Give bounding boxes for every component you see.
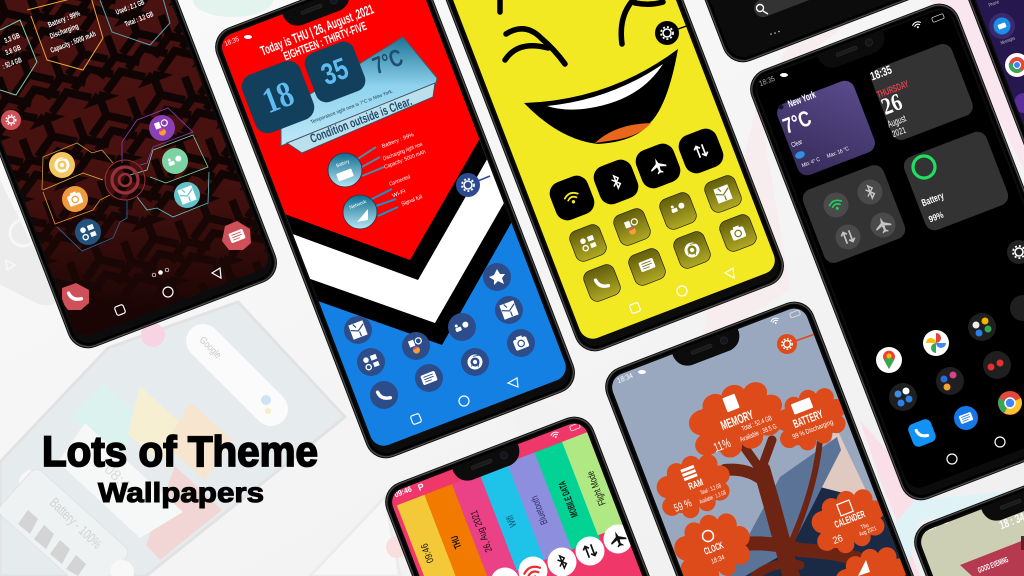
phone: grey tree cloud theme xyxy=(590,290,971,576)
screen xyxy=(222,0,566,446)
phone: far right purple partial xyxy=(868,0,1024,170)
ghost: left edge phone xyxy=(0,170,60,305)
phone body xyxy=(599,295,971,576)
cloud: calendar: Aug 2021 xyxy=(859,526,878,538)
icon: settings gear xyxy=(777,334,815,354)
phone: rainbow stripes theme xyxy=(379,400,751,576)
stripe labels xyxy=(419,469,609,564)
cloud: ram: Total : 3.2 GB xyxy=(700,483,722,497)
phone: bottom right beige theme xyxy=(900,450,1024,576)
stripe labels: 09:46 xyxy=(419,541,437,564)
icon: partial xyxy=(1014,93,1024,113)
phone: dark red circuit theme xyxy=(0,0,277,348)
icon: settings gear xyxy=(655,21,686,45)
screen xyxy=(590,290,930,576)
network ball with lines: Wi-Fi xyxy=(391,189,407,199)
phone body xyxy=(209,0,581,464)
page dots xyxy=(152,268,169,277)
hexagon stat text: Discharging xyxy=(48,21,80,41)
icon: media folder xyxy=(162,148,188,174)
icon: video folder xyxy=(983,351,1011,379)
date time widget: 26 xyxy=(878,89,906,121)
phone body xyxy=(0,0,283,354)
hexagon stat text: Capacity : 5000 mAh xyxy=(49,29,97,55)
nav buttons xyxy=(947,437,1005,464)
cloud: calendar: CALENDER xyxy=(833,509,867,531)
screen: EIGHTEEN : THIRTY-FIVE xyxy=(281,19,369,63)
notch xyxy=(282,0,354,30)
cloud: memory xyxy=(679,370,794,469)
icon: settings gear xyxy=(1007,240,1024,264)
ghost: pale panels between phones xyxy=(310,0,1024,576)
weather widget: Min: 4° C xyxy=(801,157,821,169)
battery widget xyxy=(901,129,1011,233)
phone: red white blue chevron theme xyxy=(215,0,575,458)
tree xyxy=(725,440,862,576)
screen xyxy=(900,470,1024,576)
hexagon stat text: Total : 3.2 GB xyxy=(123,9,155,29)
page dots xyxy=(770,31,780,35)
toggle: mobile data xyxy=(678,128,724,174)
weather tray: 7°C xyxy=(369,44,407,80)
icon: partial folder xyxy=(1010,295,1024,321)
phone: dark widgets theme xyxy=(740,0,1024,576)
hexagon stat text xyxy=(1,0,155,71)
network ball with lines: Signal full xyxy=(401,194,423,208)
icon: apps xyxy=(75,219,101,245)
phone body xyxy=(868,0,1024,168)
icon: phone octagon xyxy=(62,283,89,310)
toggle: wifi xyxy=(550,176,594,220)
status bar xyxy=(224,35,252,46)
icon: social folder xyxy=(936,367,964,395)
icon: messages xyxy=(954,406,978,430)
cloud: ram: Available : 1.3 GB xyxy=(699,490,727,506)
olive app icons xyxy=(567,173,759,304)
hexagon stat text: 3.8 GB xyxy=(4,43,22,57)
cloud: memory: Total : 52.4 GB xyxy=(741,415,773,433)
icon: maps xyxy=(876,347,902,373)
hexagon stat text: 3.3 GB xyxy=(3,31,21,45)
ghost: large tilted phone xyxy=(0,302,345,576)
central target xyxy=(105,160,145,200)
phone body xyxy=(418,0,790,357)
subheading: Wallpapers: Wallpapers xyxy=(98,477,264,508)
cloud: calendar xyxy=(803,480,895,562)
status bar: 18:35 xyxy=(224,36,240,48)
screen xyxy=(960,0,1024,170)
status bar xyxy=(393,423,581,499)
screen xyxy=(740,0,1024,576)
phone body xyxy=(744,0,1024,506)
icon: chrome xyxy=(998,391,1022,415)
chevron bands xyxy=(222,0,512,345)
status bar: 18:35 xyxy=(758,74,776,88)
battery ball with lines: Discharging right now xyxy=(382,142,424,162)
clock minutes card: 35 xyxy=(317,52,353,92)
clock minutes card xyxy=(304,42,366,102)
icon: social folder xyxy=(149,115,175,141)
smiley mouth xyxy=(524,49,678,144)
notch xyxy=(452,442,524,485)
battery ball with lines: Battery : 99% xyxy=(381,132,415,150)
weather widget: 7°C xyxy=(779,105,815,139)
status bar xyxy=(616,310,801,385)
cloud: clock xyxy=(665,503,761,576)
nav buttons xyxy=(629,268,734,314)
date time widget: 2021 xyxy=(891,125,907,139)
battery widget: Battery xyxy=(920,191,946,209)
stripe labels: Wifi xyxy=(505,513,519,529)
toggle circles xyxy=(490,524,632,576)
screen xyxy=(453,0,775,339)
stripe labels: Bluetooth xyxy=(529,494,551,526)
icon: google folder xyxy=(889,383,917,411)
background hills xyxy=(727,425,915,576)
ghost: large tilted phone: Battery - 100% xyxy=(47,494,105,552)
battery ball with lines xyxy=(328,132,427,187)
smiley eyes xyxy=(500,0,663,64)
network ball with lines: Network xyxy=(349,199,368,211)
status bar: 18:34 xyxy=(616,371,634,385)
stripe labels: MOBILE DATA xyxy=(557,479,581,519)
cloud: battery xyxy=(766,379,856,459)
weather tray: Temperature right now is 7°C in New York. xyxy=(310,88,394,126)
hexagon stat outlines xyxy=(0,0,170,95)
phone body xyxy=(908,450,1024,576)
cloud: ram xyxy=(648,445,740,527)
weather tray xyxy=(281,37,437,153)
clock hours card xyxy=(242,60,314,134)
icon: map xyxy=(174,182,200,208)
screen xyxy=(380,400,664,576)
icon: messages octagon xyxy=(222,221,251,250)
ghost: large tilted phone: 08:44 xyxy=(101,461,139,499)
icon: search xyxy=(756,4,768,14)
icon: phone xyxy=(906,417,938,449)
icon: settings gear xyxy=(456,173,490,197)
cloud: memory: Available : 38.5 GB xyxy=(739,422,781,444)
status bar: P xyxy=(416,481,426,493)
weather widget xyxy=(774,78,878,178)
screen xyxy=(0,0,268,336)
cloud: clock: 18:34 xyxy=(710,554,726,566)
search pill xyxy=(751,0,833,20)
icon: settings gear xyxy=(1,110,21,130)
network ball with lines xyxy=(343,174,423,229)
notch xyxy=(981,482,1024,525)
weather widget: Max: 16 °C xyxy=(826,146,850,160)
cloud: network xyxy=(827,538,919,576)
color stripes xyxy=(397,430,664,576)
connectivity toggles widget xyxy=(800,162,908,266)
screen: 0:34 xyxy=(922,523,938,535)
screen: Messages xyxy=(1000,35,1016,46)
blue round app icons xyxy=(344,263,535,409)
date time widget: 18:35 xyxy=(868,62,894,83)
hexagon stat text: Battery : 99% xyxy=(47,9,82,29)
date time widget xyxy=(868,41,976,143)
cloud: calendar: Thu xyxy=(860,523,870,531)
battery widget: 99% xyxy=(927,210,945,224)
hexagon stat text: : 52.4 GB xyxy=(1,55,23,71)
stripe labels: Flight Mode xyxy=(585,469,609,507)
cloud: battery: BATTERY xyxy=(791,407,825,431)
notch xyxy=(817,29,889,72)
heading: Lots of Theme: Lots of Theme xyxy=(42,428,318,476)
weather widget: New York xyxy=(786,90,818,110)
cloud: memory: MEMORY xyxy=(718,407,756,433)
icon: camera xyxy=(62,186,88,212)
ghost: large tilted phone: Google xyxy=(197,335,223,361)
network ball with lines: Connected xyxy=(389,174,411,188)
nav buttons xyxy=(114,268,221,316)
ghost: top mint disc xyxy=(193,0,273,17)
icon: photos xyxy=(923,330,949,356)
nav buttons xyxy=(410,378,518,425)
status bar: 09:46 xyxy=(393,484,413,499)
battery ball with lines: Capacity: 5000 mAh xyxy=(383,149,427,171)
icon: chrome xyxy=(1005,53,1024,77)
battery ball with lines: Battery xyxy=(335,159,351,169)
status bar xyxy=(758,14,944,88)
phone body xyxy=(566,0,938,68)
cloud: battery: 99 % Discharging xyxy=(792,419,834,441)
icon: tools folder xyxy=(968,313,996,341)
toggle: airplane xyxy=(636,144,680,188)
icon: chrome xyxy=(49,152,75,178)
clock hours card: 18 xyxy=(257,73,299,121)
phone body xyxy=(379,410,751,576)
icon: messages xyxy=(989,13,1015,39)
weather tray: Condition outside is Clear. xyxy=(308,94,414,146)
cloud: ram: RAM xyxy=(687,477,705,493)
phone: yellow smiley theme xyxy=(446,0,784,352)
cloud: memory: 11% xyxy=(711,435,733,455)
date time widget: THURSDAY xyxy=(876,79,911,101)
cloud: calendar: 26 xyxy=(831,533,845,547)
title xyxy=(42,428,318,508)
weather widget: Clear xyxy=(791,139,804,149)
cloud: ram: 59 % xyxy=(672,497,694,515)
cloud: clock: CLOCK xyxy=(703,540,726,558)
stripe labels: THU xyxy=(450,534,464,550)
stripe labels: 26, Aug 2021 xyxy=(469,508,495,554)
date time widget: August xyxy=(886,113,908,131)
notch xyxy=(672,327,744,370)
phone: top black partial xyxy=(566,0,938,68)
circuit lines xyxy=(42,108,209,251)
toggle: bluetooth xyxy=(594,160,638,204)
